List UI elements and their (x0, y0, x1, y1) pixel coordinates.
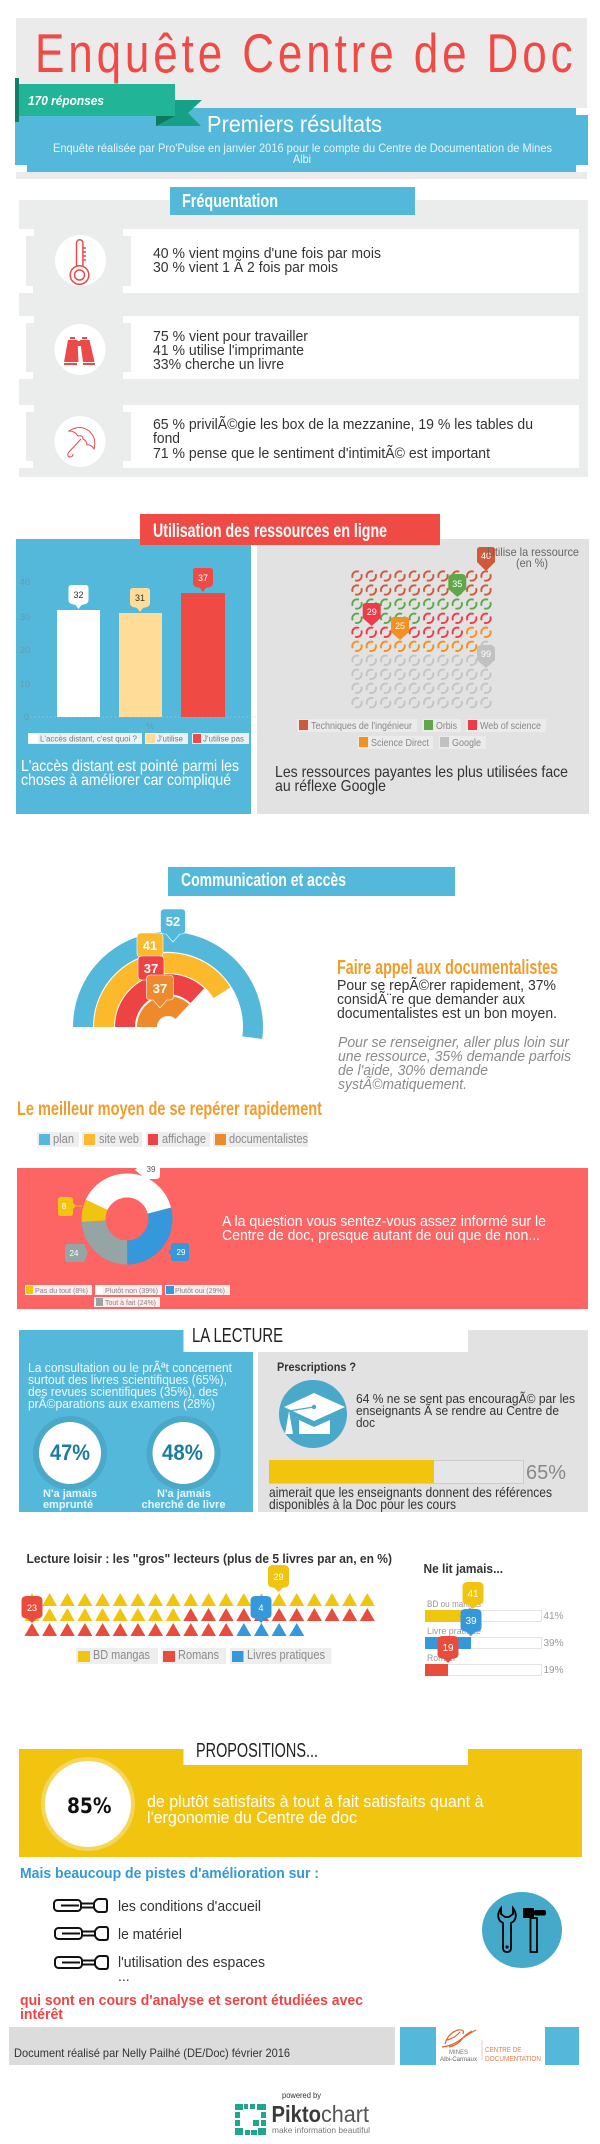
text: faire appel aux documentalistes: systÃ©matiquement. (338, 1076, 467, 1093)
panel: lecture blue (19, 1330, 253, 1512)
pins (22, 1565, 289, 1623)
footer: credits (9, 2027, 395, 2065)
row: visit frequency (19, 229, 579, 293)
legend: Science Direct (371, 738, 429, 749)
donut pins (58, 1163, 189, 1262)
donut pins: 24 (70, 1249, 79, 1258)
text: spaces figures: 71 % pense que le sentiment d'intimitÃ© est important (153, 445, 491, 462)
text: conclusion (20, 1993, 363, 2023)
text: satisfaction: de plutôt satisfaits à tout à fait satisfaits quant à (147, 1792, 484, 1811)
legend: J'utilise pas (203, 734, 244, 744)
ribbon: 170 réponses (15, 78, 202, 126)
value pins: 40 (481, 551, 491, 561)
donut chart (58, 1163, 189, 1262)
logo: piktochart (235, 2090, 370, 2135)
text: faire appel aux documentalistes: Pour se renseigner, aller plus loin sur (338, 1034, 570, 1051)
legend: gauge: affichage (162, 1132, 206, 1146)
heading: utilisation des ressources (140, 514, 440, 545)
text: conclusion: qui sont en cours d'analyse et seront étudiées avec (20, 1993, 363, 2009)
logo: piktochart: powered by (282, 2090, 322, 2100)
text: faire appel aux documentalistes: considÃ¨re que demander aux (337, 991, 525, 1008)
logo: mines albi-carmaux: MINES (449, 2049, 469, 2056)
bars: Roman (427, 1653, 455, 1664)
pins: 4 (258, 1603, 264, 1613)
y axis labels: 20 (20, 645, 30, 655)
chart: gros lecteurs (22, 1552, 392, 1664)
ring grid chart (352, 571, 491, 707)
gauge pins: 37 (153, 981, 167, 996)
pins: 39 (465, 1616, 477, 1627)
triangles: bd mangas (24, 1593, 375, 1621)
icon: piktochart mark (235, 2104, 266, 2135)
gauge pins (137, 909, 186, 1008)
legend: donut (25, 1285, 230, 1307)
chart title: (en %) (516, 556, 548, 570)
icon: wrench and hammer (482, 1892, 562, 1968)
text: matériel: le matériel (118, 1926, 182, 1943)
chart title (487, 545, 579, 570)
chart heading: Ne lit jamais... (424, 1561, 503, 1576)
title: Enquête Centre de Doc (35, 22, 573, 84)
progress bar: 65% (269, 1460, 566, 1484)
legend: donut: Plutôt oui (29%) (175, 1286, 225, 1295)
row: preferred spaces (19, 405, 579, 468)
text: espaces: l'utilisation des espaces (118, 1954, 265, 1971)
text: encouragement: 64 % ne se sent pas encouragÃ© par les (356, 1391, 575, 1406)
text: lecture usage: prÃ©parations aux examens (28%) (28, 1396, 215, 1411)
logo: piktochart: chart (321, 2101, 370, 2127)
bars: 39% (544, 1638, 564, 1649)
row: reasons to visit (19, 316, 579, 379)
text: ellipsis: ... (118, 1968, 130, 1984)
legend: donut: Tout à fait (24%) (105, 1298, 156, 1307)
panel: prescriptions (258, 1330, 588, 1512)
icon: screwdriver (55, 1927, 108, 1940)
banner: premiers résultats (15, 108, 588, 172)
logo: piktochart: make information beautiful (272, 2125, 370, 2135)
logo: mines albi-carmaux: CENTRE DE (485, 2047, 522, 2054)
text: encouragement: doc (356, 1415, 375, 1430)
heading: propositions: PROPOSITIONS... (196, 1740, 318, 1762)
text: frequency figures (153, 245, 381, 276)
icon: graduation cap (279, 1380, 347, 1448)
bars: BD ou mangas (427, 1599, 481, 1610)
bar chart: 37 (198, 573, 208, 583)
stat: 48%: 48% (162, 1440, 203, 1465)
legend: Romans (178, 1647, 219, 1662)
y axis labels (20, 577, 154, 731)
text: faire appel aux documentalistes: Pour se repÃ©rer rapidement, 37% (337, 977, 556, 994)
stat: 47%: 47% (50, 1440, 90, 1465)
pins: 41 (467, 1589, 479, 1600)
heading: pistes d'amélioration: Mais beaucoup de pistes d'amélioration sur : (20, 1865, 319, 1882)
y axis labels: 0 (24, 712, 29, 722)
stat: 48%: N'a jamais (157, 1488, 211, 1500)
text: lecture usage: surtout des livres scientifiques (65%), (28, 1372, 227, 1387)
text: faire appel aux documentalistes: documentalistes est un bon moyen. (337, 1005, 557, 1022)
banner: premiers résultats: Premiers résultats (207, 111, 382, 137)
legend: gauge: documentalistes (229, 1132, 308, 1146)
gauge pins: 41 (143, 938, 157, 953)
legend (76, 1647, 332, 1664)
legend: gauge: plan (53, 1132, 74, 1146)
legend: BD mangas (93, 1647, 150, 1662)
donut pins: 39 (147, 1165, 156, 1174)
stat: 85%: 85% (67, 1794, 112, 1818)
panel: fréquentation (19, 187, 588, 477)
logo: mines albi-carmaux: Albi-Carmaux (440, 2056, 478, 2063)
text: remote access comment (21, 758, 239, 789)
text: frequency figures: 40 % vient moins d'une fois par mois (153, 245, 381, 262)
text: spaces figures (153, 416, 533, 462)
logo: mines albi-carmaux (440, 2030, 541, 2063)
logo: mines albi-carmaux: DOCUMENTATION (485, 2056, 541, 2063)
chart title: Utilise la ressource (487, 545, 579, 559)
stat: 48%: cherché de livre (142, 1499, 226, 1511)
legend: donut: Pas du tout (8%) (35, 1286, 88, 1295)
chart heading: Lecture loisir : les "gros" lecteurs (plus de 5 livres par an, en %) (26, 1552, 392, 1566)
heading: prescriptions: Prescriptions ? (277, 1362, 356, 1374)
bar chart: 31 (135, 593, 145, 603)
footer: logo band (400, 2027, 579, 2065)
stat: 85% (41, 1757, 135, 1851)
heading: fréquentation (170, 187, 415, 215)
panel: remote access chart (16, 539, 257, 814)
text: reasons figures: 33% cherche un livre (153, 356, 284, 373)
donut pins: 29 (177, 1248, 186, 1257)
bars: 41% (544, 1611, 564, 1622)
text: paid resources comment: au réflexe Google (275, 778, 386, 795)
value pins: 99 (481, 649, 491, 659)
stat: 47%: N'a jamais (43, 1488, 97, 1500)
chart: ne lit jamais (424, 1561, 564, 1676)
text: spaces figures: fond (153, 430, 180, 447)
heading: la lecture (184, 1325, 468, 1352)
text: references wish: aimerait que les enseignants donnent des références (269, 1484, 552, 1500)
panel: header (15, 18, 588, 179)
text: lecture usage: La consultation ou le prÃªt concernent (28, 1360, 232, 1375)
y axis labels: 40 (20, 577, 30, 587)
pins (438, 1582, 484, 1663)
bars: 19% (544, 1665, 564, 1676)
panel: online resources chart (257, 539, 589, 814)
heading: meilleur moyen: Le meilleur moyen de se repérer rapidement (17, 1099, 323, 1120)
text: remote access comment: choses à améliorer car compliqué (21, 772, 231, 789)
heading: communication et accès (168, 867, 455, 896)
text: reasons figures: 75 % vient pour travailler (153, 328, 308, 345)
heading: la lecture: LA LECTURE (192, 1325, 283, 1347)
triangles: livres pratiques (236, 1623, 304, 1636)
ribbon: 170 réponses: 170 réponses (28, 93, 104, 108)
text: lecture usage (28, 1360, 232, 1411)
logo: piktochart: Pikto (272, 2101, 321, 2127)
legend: gauge (37, 1132, 308, 1147)
text: spaces figures: 65 % privilÃ©gie les box de la mezzanine, 19 % les tables du (153, 416, 533, 433)
text: paid resources comment: Les ressources payantes les plus utilisées face (275, 764, 568, 781)
stat: 47%: emprunté (43, 1499, 93, 1511)
y axis labels: % (146, 721, 154, 731)
value pins: 35 (452, 579, 462, 589)
legend: J'utilise (157, 734, 184, 744)
text: frequency figures: 30 % vient 1 Ã 2 fois par mois (153, 259, 338, 276)
text: lecture usage: des revues scientifiques (35%), des (28, 1384, 218, 1399)
icon: screwdriver (55, 1956, 108, 1969)
text: faire appel aux documentalistes: une ressource, 35% demande parfois (338, 1048, 571, 1065)
text: faire appel aux documentalistes: de l'aide, 30% demande (338, 1062, 488, 1079)
text: reasons figures: 41 % utilise l'imprimante (153, 342, 304, 359)
donut pins: 8 (62, 1202, 67, 1211)
legend (297, 719, 546, 749)
bar chart (57, 568, 225, 717)
text: conclusion: intérêt (20, 2007, 63, 2023)
pins: 19 (442, 1643, 454, 1654)
text: reasons figures (153, 328, 308, 373)
list: improvement tracks (54, 1898, 265, 1984)
text: references wish: disponibles à la Doc pour les cours (269, 1496, 456, 1512)
y axis labels: 10 (20, 679, 30, 689)
stat: 47% (33, 1416, 107, 1511)
value pins (363, 547, 495, 668)
gauge pins: 52 (166, 914, 180, 929)
text: remote access comment: L'accès distant est pointé parmi les (21, 758, 239, 775)
pins: 23 (27, 1603, 37, 1613)
text: satisfaction: l'ergonomie du Centre de doc (147, 1808, 357, 1827)
y axis labels: 30 (20, 612, 30, 622)
legend: Techniques de l'ingénieur (311, 721, 413, 732)
value pins: 29 (367, 607, 377, 617)
bars (425, 1599, 564, 1676)
text: satisfaction (147, 1792, 484, 1827)
legend: Google (452, 738, 481, 749)
legend: donut: Plutôt non (39%) (105, 1286, 158, 1295)
text: faire appel aux documentalistes (337, 957, 571, 1093)
text: encouragement (356, 1391, 575, 1430)
bar chart: 32 (73, 590, 84, 600)
panel: satisfaction (19, 1740, 582, 1857)
footer: credits: Document réalisé par Nelly Pailhé (DE/Doc) février 2016 (14, 2046, 290, 2060)
gauge pins: 37 (144, 961, 158, 976)
heading: communication et accès: Communication et accès (181, 870, 346, 890)
panel: information question (17, 1163, 588, 1309)
text: references wish (269, 1484, 552, 1512)
text: accueil: les conditions d'accueil (118, 1898, 261, 1915)
banner: premiers résultats: Albi (293, 152, 311, 166)
text: information comment: A la question vous sentez-vous assez informé sur le (222, 1213, 546, 1230)
text: encouragement: enseignants Ã se rendre au Centre de (356, 1403, 559, 1418)
banner: premiers résultats: Enquête réalisée par Pro'Pulse en janvier 2016 pour le compte du Centre de Documentation de Mines (53, 141, 552, 155)
legend: Livres pratiques (247, 1647, 325, 1662)
icon: umbrella (68, 428, 95, 457)
legend (28, 733, 249, 744)
legend: gauge: site web (99, 1132, 139, 1146)
pins: 29 (273, 1572, 284, 1582)
heading: fréquentation: Fréquentation (182, 191, 278, 211)
text: information comment (222, 1213, 546, 1244)
radial gauge chart (83, 909, 253, 1038)
value pins: 25 (395, 621, 405, 631)
heading: utilisation des ressources: Utilisation des ressources en ligne (153, 521, 387, 542)
legend: L'accès distant, c'est quoi ? (40, 734, 138, 744)
triangles: romans (24, 1608, 375, 1636)
icon: thermometer (70, 240, 89, 284)
progress bar: 65%: 65% (526, 1462, 566, 1484)
stat: 48% (142, 1416, 226, 1511)
text: information comment: Centre de doc, presque autant de oui que de non... (222, 1227, 540, 1244)
text: paid resources comment (275, 764, 568, 795)
icon: binoculars (64, 337, 95, 365)
legend: Orbis (436, 721, 457, 732)
legend: Web of science (480, 721, 541, 732)
icon: screwdriver (54, 1899, 107, 1912)
bars: Livre pratique (427, 1626, 481, 1637)
